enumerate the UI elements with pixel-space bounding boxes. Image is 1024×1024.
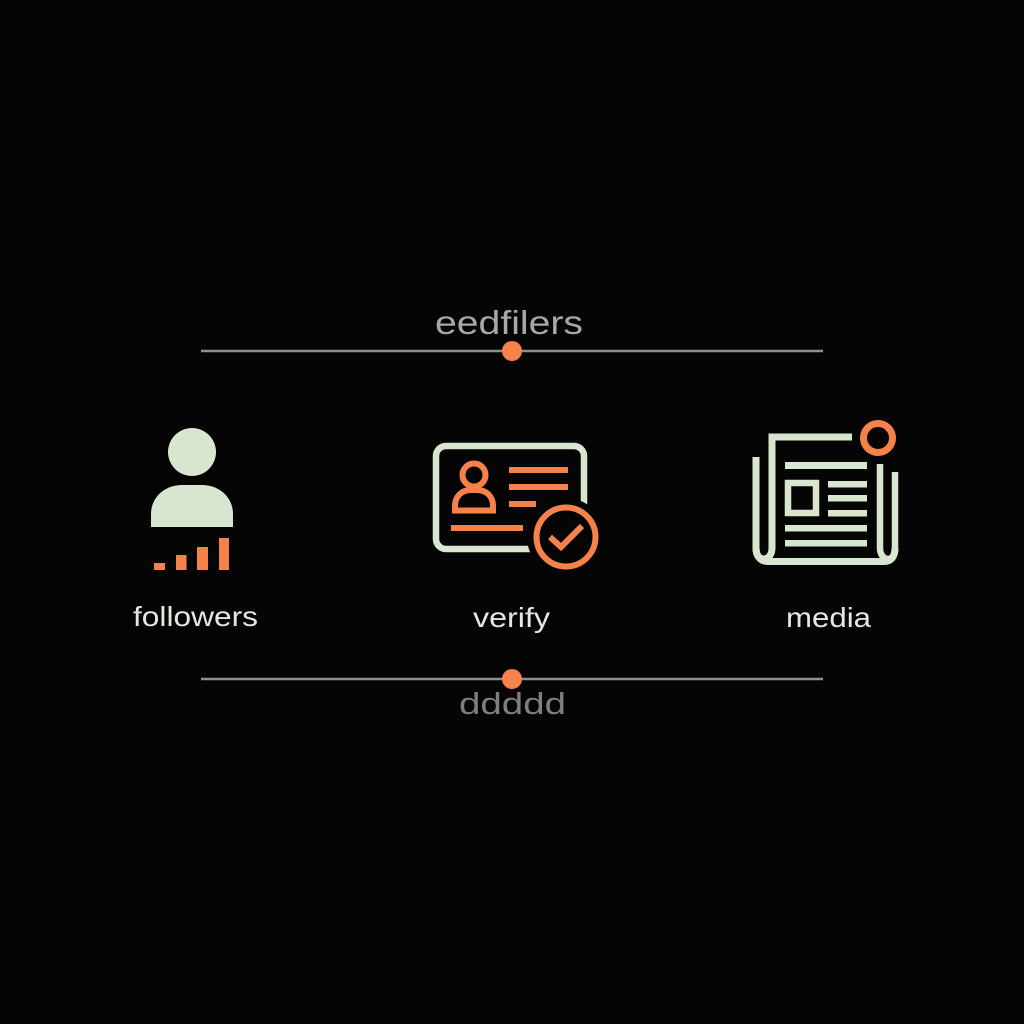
label: media: media [786,602,871,633]
top divider with heading [201,304,823,361]
icon: verified id card [436,446,605,576]
bottom divider with caption [201,669,823,721]
label: followers: followers [133,601,258,632]
top divider with heading: eedfilers [435,304,583,341]
label: verify: verify [473,602,550,633]
icon: newspaper with notification ring [756,424,895,562]
bottom divider with caption: ddddd [459,686,566,721]
icon: person with follower bars [151,428,233,570]
